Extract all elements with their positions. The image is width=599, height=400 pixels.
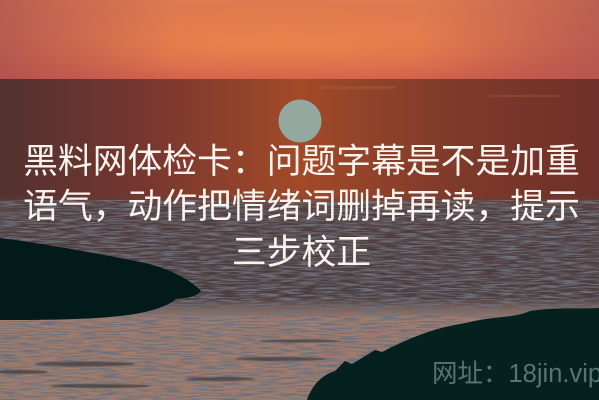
icon: pale sun disc xyxy=(278,100,322,142)
watermark: site address: 网址：18jin.vip xyxy=(432,360,599,388)
title line 3: 三步校正 xyxy=(232,233,371,272)
left headland silhouette xyxy=(0,238,201,320)
right headland silhouette xyxy=(307,308,599,400)
title text block xyxy=(23,142,580,272)
title line 1: 黑料网体检卡：问题字幕是不是加重 xyxy=(23,142,580,181)
title line 2: 语气，动作把情绪词删掉再读，提示 xyxy=(23,187,580,226)
